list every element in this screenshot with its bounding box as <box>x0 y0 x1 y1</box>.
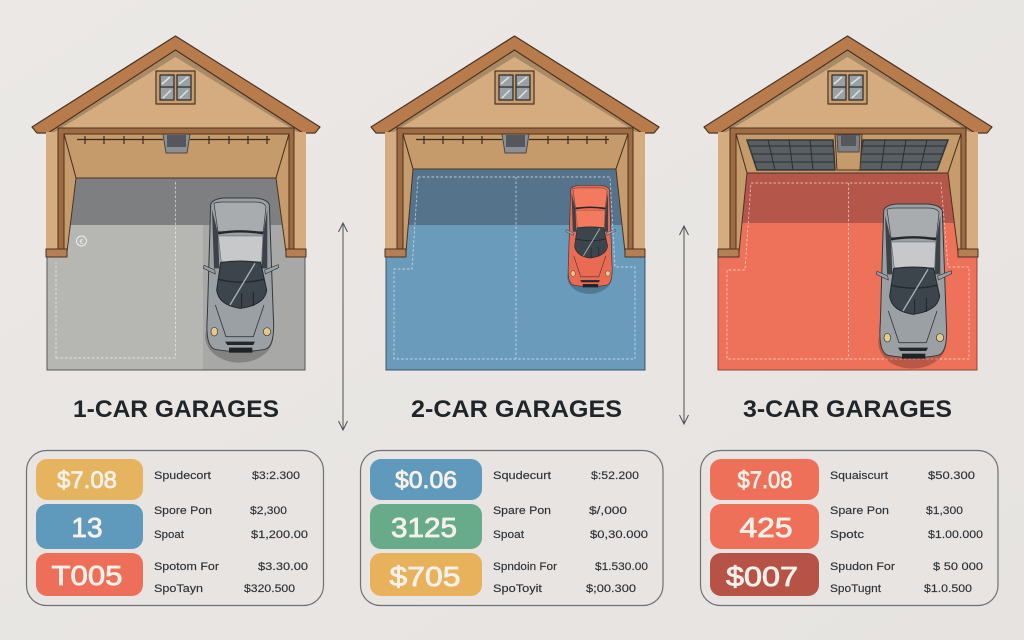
stat pill: $0.06 <box>370 459 482 500</box>
car: red <box>566 185 616 294</box>
stat pill: $7.08: $7.08 <box>57 467 117 494</box>
stat pill: $7.08 <box>710 459 819 500</box>
door frame <box>385 128 645 257</box>
garage door: right <box>859 140 948 170</box>
cost rows <box>493 470 648 595</box>
cost rows: $/,000 <box>589 505 627 517</box>
cost rows: Spotom For <box>154 561 219 573</box>
garage 3: three-car illustration <box>704 36 992 370</box>
cost rows: Squdecurt <box>493 470 551 482</box>
stat pill: $0.06: $0.06 <box>395 467 457 494</box>
cost rows: $ 50 000 <box>933 561 983 573</box>
stat pill: $705 <box>370 553 482 596</box>
arrow: vertical measure right <box>680 226 688 424</box>
arrow: vertical measure left <box>338 223 348 430</box>
stat pill: T005: T005 <box>52 560 122 591</box>
panel: 1-car costs <box>26 450 324 606</box>
cost rows: $:52.200 <box>591 470 639 482</box>
stat pill: 13 <box>36 504 143 549</box>
roof and gable wall <box>32 36 320 252</box>
heading: 3-car: 3-CAR GARAGES <box>743 396 952 423</box>
panel: 3-car costs <box>700 450 998 606</box>
stat pill: 425 <box>710 504 819 549</box>
cost rows: Spndoin For <box>493 561 557 573</box>
door frame <box>46 128 306 257</box>
cost rows: $3:2.300 <box>252 470 300 482</box>
stat pill: 3125: 3125 <box>391 512 457 543</box>
floor: grey concrete <box>47 178 305 370</box>
door track <box>416 136 609 144</box>
cost rows <box>154 470 308 595</box>
cost rows <box>830 470 983 595</box>
stat pill: T005 <box>36 553 143 596</box>
cost rows: $1.0.500 <box>924 583 972 595</box>
interior back wall <box>403 134 628 252</box>
icon: small coin mark: € <box>80 239 84 246</box>
cost rows: SpoTugnt <box>830 583 881 595</box>
door track <box>77 136 270 144</box>
icon: small coin mark <box>76 236 86 246</box>
stat pill: $007 <box>710 553 819 596</box>
stat pill: 13: 13 <box>71 512 103 543</box>
cost rows: $1,200.00 <box>251 529 308 541</box>
door frame <box>718 128 978 257</box>
cost rows: Spoat <box>154 529 184 541</box>
floor: coral concrete <box>718 173 977 370</box>
heading: 1-car: 1-CAR GARAGES <box>73 396 279 423</box>
interior back wall <box>64 134 289 252</box>
cost rows: Squaiscurt <box>830 470 888 482</box>
cost rows: $1.530.00 <box>595 561 648 573</box>
car: grey <box>876 204 952 369</box>
cost rows: $320.500 <box>244 583 295 595</box>
panel: 2-car costs <box>360 450 663 606</box>
roof and gable wall <box>371 36 659 252</box>
garage 2: two-car illustration <box>371 36 659 370</box>
cost rows: Spore Pon <box>154 505 212 517</box>
floor: blue concrete <box>386 169 645 370</box>
door opener <box>163 134 190 153</box>
cost rows: Spudon For <box>830 561 895 573</box>
stat pill: $007: $007 <box>726 561 798 592</box>
cost rows: $50.300 <box>928 470 975 482</box>
car: grey <box>203 198 279 363</box>
cost rows: $1,300 <box>926 505 963 517</box>
stat pill: $7.08 <box>36 459 143 500</box>
stat pill: $705: $705 <box>390 561 460 592</box>
cost rows: Spoat <box>493 529 524 541</box>
cost rows: SpoTayn <box>154 583 203 595</box>
door opener <box>502 134 529 153</box>
cost rows: $0,30.000 <box>590 529 648 541</box>
roof and gable wall <box>704 36 992 252</box>
cost rows: Spare Pon <box>493 505 551 517</box>
door opener <box>835 134 862 170</box>
heading: 2-car: 2-CAR GARAGES <box>411 396 622 423</box>
cost rows: Spotc <box>830 529 865 541</box>
cost rows: SpoToyit <box>493 583 542 595</box>
interior back wall <box>736 134 961 252</box>
cost rows: $;00.300 <box>586 583 636 595</box>
cost rows: $2,300 <box>250 505 287 517</box>
cost rows: $3.30.00 <box>258 561 308 573</box>
stat pill: 3125 <box>370 504 482 549</box>
garage 1: one-car illustration <box>32 36 320 370</box>
stat pill: $7.08: $7.08 <box>738 467 792 494</box>
cost rows: Spudecort <box>154 470 211 482</box>
garage door: left <box>747 140 835 170</box>
cost rows: Spare Pon <box>830 505 889 517</box>
stat pill: 425: 425 <box>740 512 792 543</box>
cost rows: $1.00.000 <box>928 529 983 541</box>
